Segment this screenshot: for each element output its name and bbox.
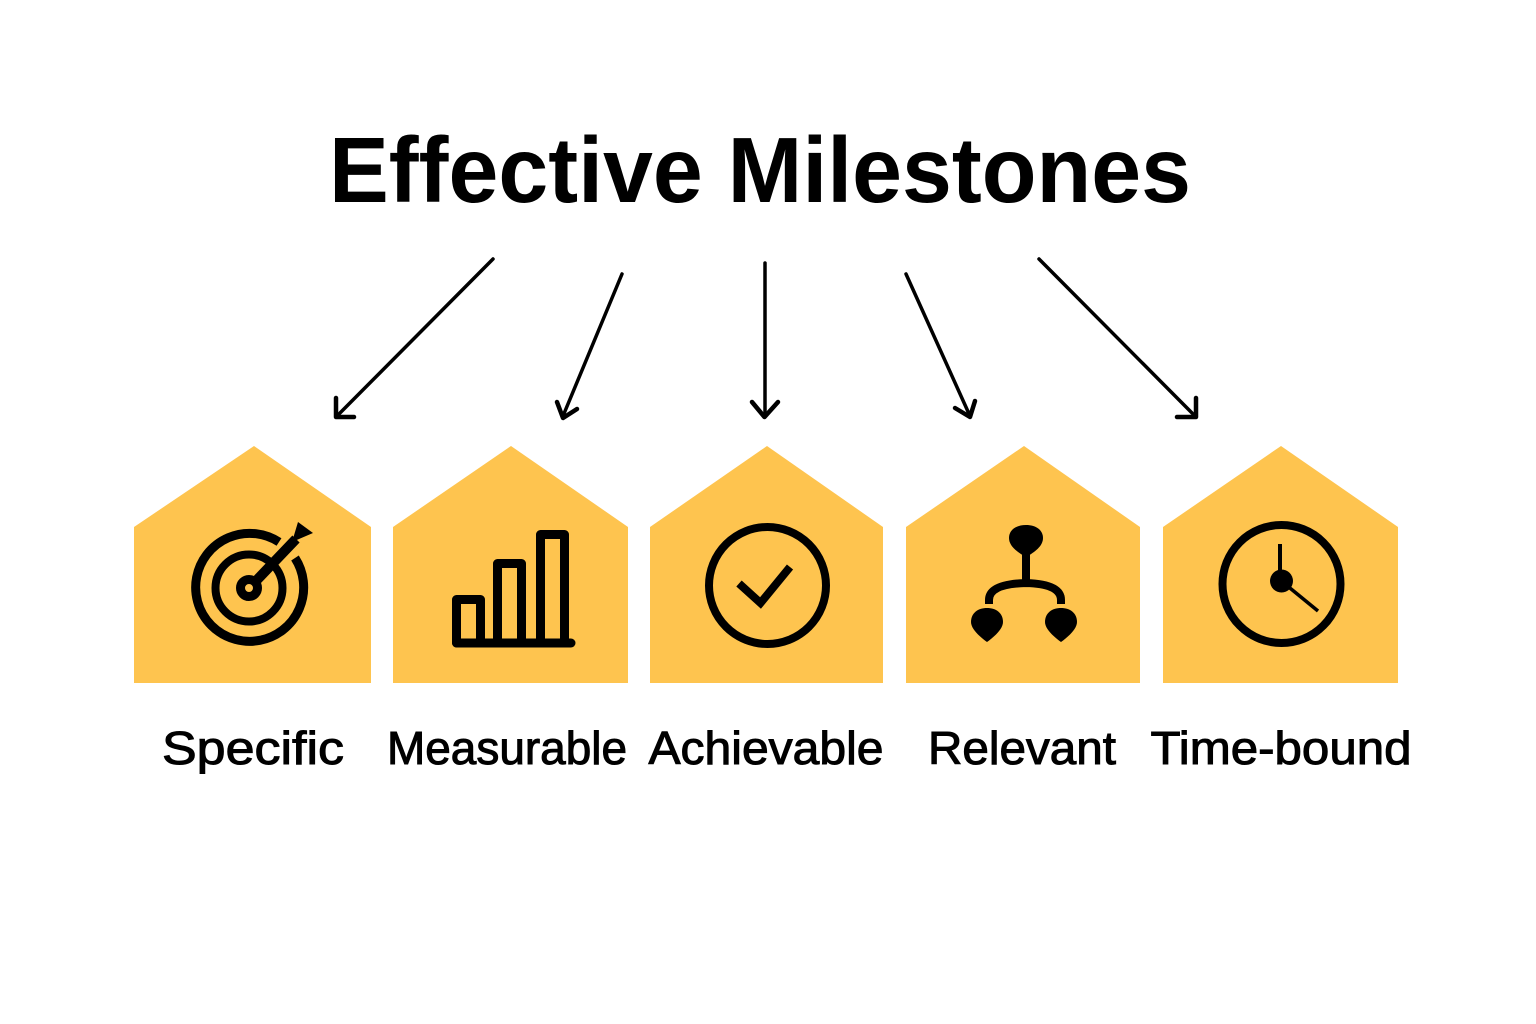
- label: Time-bound: Time-bound: [1150, 722, 1412, 774]
- arrow: to Measurable: [557, 274, 622, 418]
- arrow: to Achievable: [752, 263, 778, 417]
- icon: check circle: [709, 527, 826, 644]
- arrow: to Time-bound: [1039, 259, 1196, 417]
- panel: Specific: [134, 446, 371, 683]
- label: Achievable: Achievable: [648, 722, 884, 774]
- icon: bar chart: [456, 534, 571, 643]
- label: Specific: Specific: [162, 722, 344, 774]
- panel: Time-bound: [1163, 446, 1398, 683]
- panel: Measurable: [393, 446, 628, 683]
- panel: Relevant: [906, 446, 1140, 683]
- icon: target with arrow: [196, 522, 313, 641]
- icon: hierarchy: [971, 525, 1077, 642]
- panel: Achievable: [650, 446, 883, 683]
- label: Relevant: Relevant: [928, 722, 1116, 774]
- icon: clock: [1222, 525, 1340, 643]
- arrow: to Relevant: [906, 274, 975, 417]
- arrows: [336, 259, 1196, 418]
- title: Effective Milestones: [329, 118, 1191, 222]
- arrow: to Specific: [336, 259, 493, 417]
- label: Measurable: Measurable: [387, 722, 627, 774]
